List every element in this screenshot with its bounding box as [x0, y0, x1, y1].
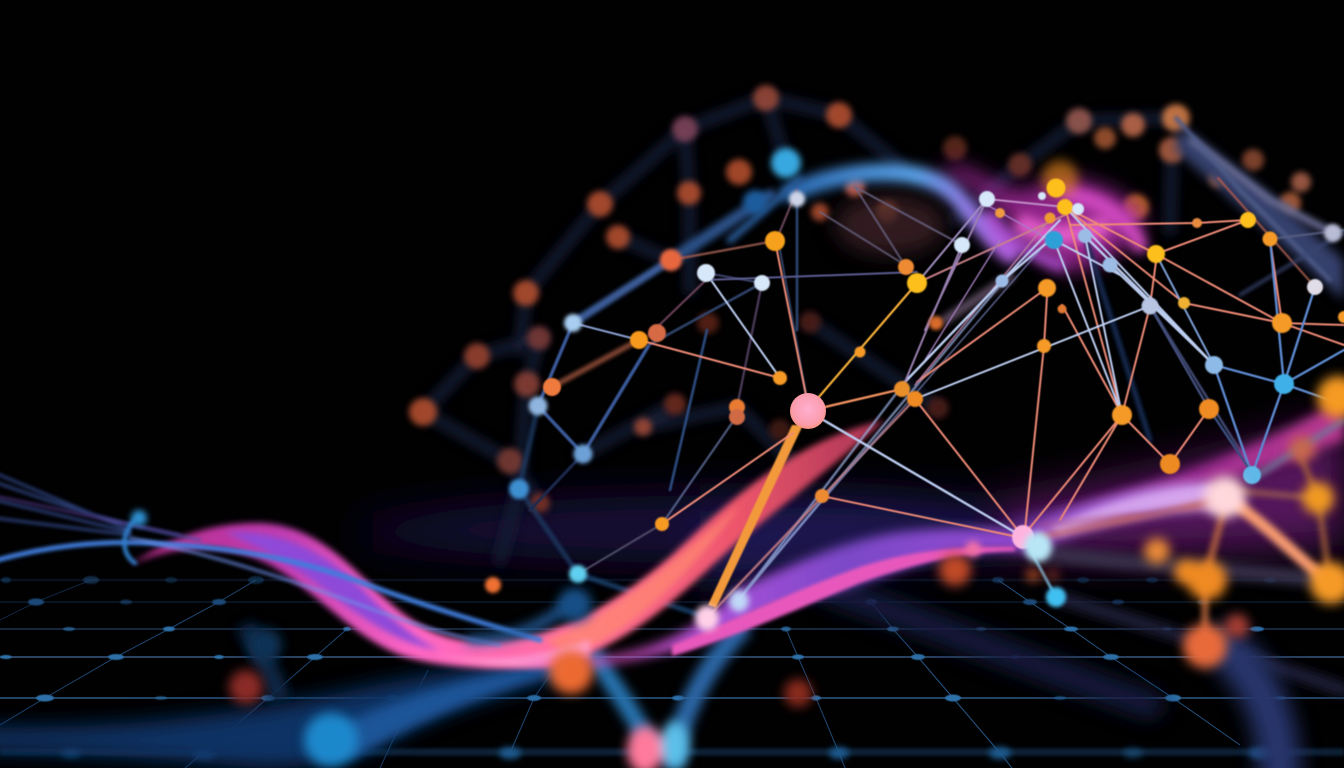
right magenta ribbon [1000, 398, 1344, 530]
purple haze behind ribbons [360, 420, 1344, 590]
pink and purple ribbon centre to right [500, 482, 1225, 668]
bright mesh nodes, orange [485, 178, 1344, 593]
fuzzy right side lines from hub [1040, 420, 1344, 646]
perspective floor grid [0, 576, 1344, 768]
mid mesh edges in blue [519, 118, 1344, 615]
blue ribbons bottom left [0, 625, 745, 768]
bright mesh nodes, white and blue [509, 148, 1342, 607]
pink ribbon left to centre [130, 420, 885, 668]
sharp front mesh edges [573, 199, 1344, 597]
back blurred mesh edges [423, 98, 1176, 560]
foreground defocused orange and blue nodes [229, 376, 1344, 768]
hub pink and cyan nodes [695, 525, 1052, 631]
blue strand ribbons left [0, 473, 575, 645]
centre thick orange and pale beams [707, 250, 1040, 618]
blue arch ribbon and magenta glow at top [790, 160, 1145, 270]
dim grey-purple bands lower right [830, 552, 1344, 768]
central large pink node [790, 393, 826, 429]
back orange blurred nodes [409, 85, 1311, 513]
